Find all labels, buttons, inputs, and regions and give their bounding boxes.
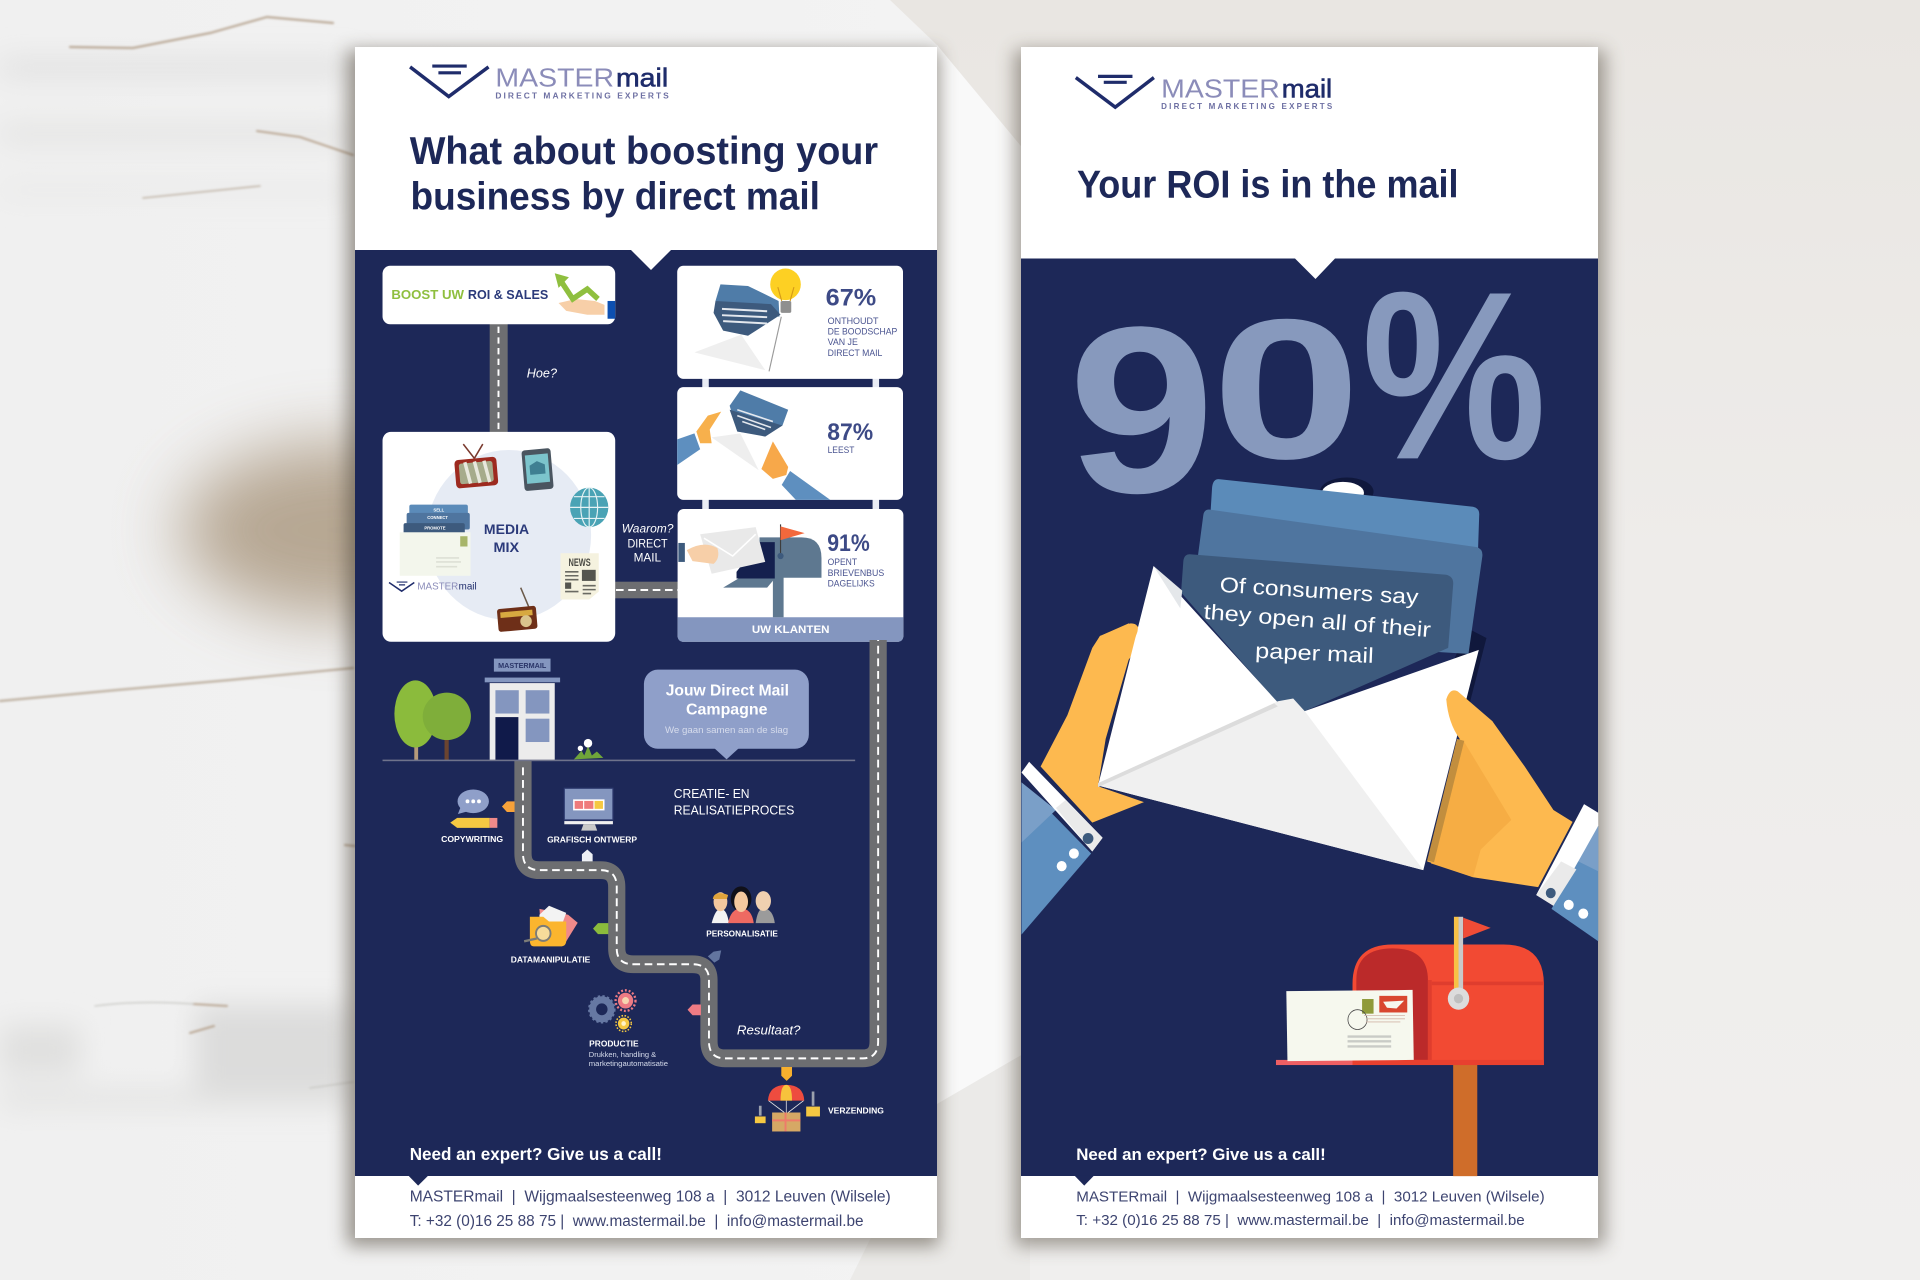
icon: newspaper [560, 553, 599, 599]
step: grafisch ontwerp: GRAFISCH ONTWERP [547, 834, 637, 844]
icon: hand and mailbox [678, 524, 821, 617]
left cuff and sleeve [1021, 762, 1103, 935]
footer: contact details: T: +32 (0)16 25 88 75 | www.mastermail.be | info@mastermail.be [1076, 1213, 1525, 1229]
panel connectors [706, 378, 876, 511]
logo: MASTERmail: mail [616, 63, 668, 92]
panel: right flyer [1021, 47, 1598, 1238]
text: Hoe?: Hoe? [527, 365, 558, 380]
text: waarom direct mail [622, 521, 674, 565]
logo: MASTERmail: DIRECT MARKETING EXPERTS [495, 90, 669, 101]
right flyer top content [1068, 73, 1546, 543]
logo: MASTERmail: MASTER [495, 63, 614, 92]
title: Your ROI is in the mail [1077, 163, 1459, 207]
label: uw klanten: UW KLANTEN [752, 624, 830, 636]
stat: 67 percent: DIRECT MAIL [828, 348, 882, 358]
callout: of consumers say: paper mail [1255, 640, 1374, 668]
stat: 87 percent: LEEST [828, 445, 855, 455]
illustration: flowers [574, 739, 603, 759]
panel: stat 91% and customers [678, 509, 903, 642]
panel: left navy body [355, 250, 937, 1176]
step: productie: Drukken, handling & [589, 1050, 656, 1059]
right hand [1427, 721, 1573, 887]
step: personalisatie: PERSONALISATIE [706, 928, 778, 939]
thumbs over envelope [1092, 623, 1508, 747]
right cuff and sleeve [1536, 804, 1598, 941]
heading: creatie- en realisatieproces: CREATIE- EN [674, 786, 750, 801]
stat: 91 percent: DAGELIJKS [828, 578, 875, 588]
step: productie [589, 990, 701, 1068]
stat: 91 percent: 91% [827, 530, 870, 556]
callout: jouw direct mail campagne: Campagne [686, 701, 768, 718]
heading: media mix: MIX [494, 539, 520, 555]
footer: contact details [1076, 1189, 1545, 1229]
step: datamanipulatie [511, 906, 608, 965]
footer: contact details: MASTERmail | Wijgmaalsesteenweg 108 a | 3012 Leuven (Wilsele) [1076, 1189, 1545, 1206]
letter with stamps [1286, 990, 1414, 1061]
title: What about boosting your [410, 130, 878, 173]
road: campaign route [523, 640, 878, 1058]
panel: stat 87% [677, 387, 903, 500]
ground line [383, 760, 855, 761]
step: productie: marketingautomatisatie [589, 1059, 668, 1068]
heading: creatie- en realisatieproces [674, 786, 794, 817]
heading: media mix: MEDIA [484, 521, 529, 537]
callout: of consumers say [1203, 574, 1432, 668]
illustration: envelope held by hands [1021, 477, 1598, 941]
stat: 91 percent: OPENT [828, 557, 858, 567]
logo: MASTERmail [1076, 73, 1333, 111]
heading: creatie- en realisatieproces: REALISATIEPROCES [674, 802, 794, 817]
icon: hands with letter [677, 390, 830, 500]
icon: opened letter and bulb [694, 269, 801, 371]
icon: direct mail stack [400, 505, 471, 576]
logo: mini MASTERmail: MASTER [417, 581, 458, 593]
illustration: red mailbox [1276, 917, 1544, 1176]
text: resultaat?: Resultaat? [737, 1022, 801, 1038]
icon: direct mail stack: SELL [433, 507, 445, 512]
footer: contact details: T: +32 (0)16 25 88 75 | www.mastermail.be | info@mastermail.be [410, 1213, 864, 1230]
left flyer lower content [383, 640, 891, 1230]
callout: of consumers say: they open all of their [1203, 600, 1432, 642]
callout: jouw direct mail campagne: We gaan samen aan de slag [665, 725, 788, 735]
heading: media mix [484, 521, 529, 555]
stat: 67 percent: ONTHOUDT [828, 316, 879, 326]
icon: direct mail stack: PROMOTE [424, 525, 446, 531]
panel: boost ROI and sales [383, 266, 615, 324]
logo: MASTERmail [410, 63, 669, 101]
road: media mix to customers [614, 582, 679, 598]
icon: television [454, 444, 498, 489]
right flyer lower content [1021, 477, 1598, 1229]
footer: contact details: MASTERmail | Wijgmaalsesteenweg 108 a | 3012 Leuven (Wilsele) [410, 1188, 891, 1206]
call to action: Need an expert? Give us a call! [1076, 1145, 1326, 1164]
left hand [1041, 623, 1144, 823]
text: waarom direct mail: Waarom? [622, 521, 674, 535]
envelope [1098, 566, 1479, 870]
panel: media mix [383, 432, 615, 642]
logo: mini MASTERmail: mail [459, 581, 477, 593]
icon: hand with growth arrow [555, 273, 615, 319]
big stat: 90%: 0 [1212, 278, 1361, 501]
stat: 91 percent [827, 530, 884, 588]
text: waarom direct mail: MAIL [634, 550, 661, 565]
icon: direct mail stack: CONNECT [427, 515, 448, 520]
icon: newspaper: NEWS [569, 557, 591, 569]
step: copywriting: COPYWRITING [441, 834, 503, 844]
title: business by direct mail [410, 175, 820, 219]
letter cards [1181, 479, 1482, 711]
callout: jouw direct mail campagne: Jouw Direct Mail [666, 682, 789, 699]
big stat: 90%: 9 [1068, 278, 1215, 543]
stat: 67 percent: VAN JE [828, 337, 858, 347]
icon: radio [497, 588, 538, 632]
step: copywriting [441, 789, 515, 844]
road: boost to media mix [490, 323, 508, 433]
panel: right navy body [1021, 258, 1598, 1176]
step: verzending [755, 1067, 884, 1131]
step: grafisch ontwerp [547, 788, 637, 861]
step: datamanipulatie: DATAMANIPULATIE [511, 955, 591, 965]
step: productie: PRODUCTIE [589, 1038, 639, 1049]
step: personalisatie [706, 886, 778, 963]
stat: 87 percent: 87% [827, 419, 873, 445]
logo: MASTERmail: mail [1282, 74, 1332, 103]
illustration: mastermail building [485, 659, 560, 760]
footer notch [1074, 1175, 1094, 1186]
left flyer top content [383, 63, 903, 642]
text: waarom direct mail: DIRECT [627, 536, 668, 550]
panel: boost ROI and sales: ROI & SALES [468, 287, 549, 302]
step: verzending: VERZENDING [828, 1107, 884, 1116]
panel: stat 67% [677, 266, 903, 379]
call to action: Need an expert? Give us a call! [410, 1145, 662, 1164]
footer: contact details [410, 1188, 891, 1230]
illustration: mastermail building: MASTERMAIL [498, 663, 547, 670]
footer notch [408, 1175, 428, 1186]
icon: tablet [521, 448, 554, 491]
logo: MASTERmail: MASTER [1161, 73, 1280, 103]
big stat: 90%: % [1362, 241, 1546, 510]
icon: globe [570, 488, 608, 527]
panel: boost ROI and sales: BOOST UW [391, 287, 465, 302]
callout: jouw direct mail campagne [644, 670, 809, 759]
stat: 67 percent: DE BOODSCHAP [828, 326, 897, 337]
callout: of consumers say: Of consumers say [1219, 574, 1420, 609]
envelope back shadow [1320, 477, 1486, 735]
title [410, 130, 878, 219]
stat: 67 percent: 67% [826, 284, 876, 311]
stat: 91 percent: BRIEVENBUS [828, 568, 884, 578]
illustration: trees [394, 680, 471, 760]
big stat: 90% [1068, 241, 1546, 543]
panel: left flyer [355, 47, 937, 1238]
logo: MASTERmail: DIRECT MARKETING EXPERTS [1161, 102, 1333, 111]
logo: mini MASTERmail [389, 581, 477, 593]
stat: 67 percent [826, 284, 897, 358]
